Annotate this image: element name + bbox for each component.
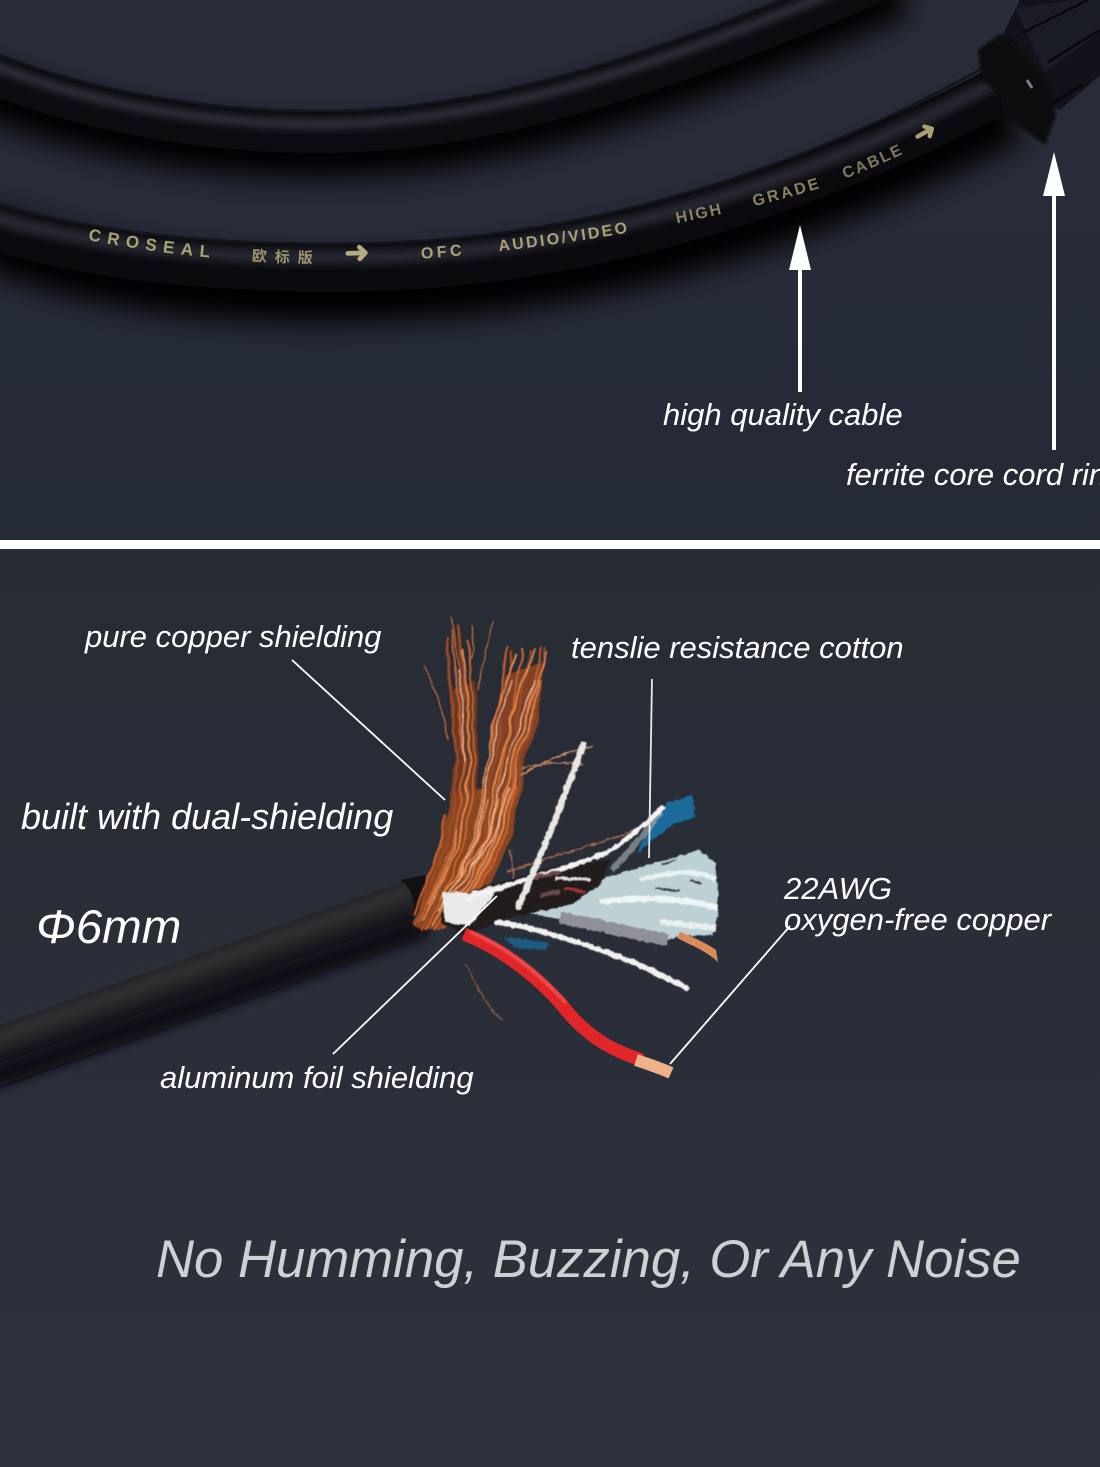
label: high quality cable: high quality cable <box>663 397 903 432</box>
cable print text: CABLE <box>842 144 902 178</box>
arrow: high quality cable <box>789 225 811 392</box>
copper shielding strands <box>413 618 548 930</box>
black cable sheath <box>0 875 430 1078</box>
cable print text: AUDIO/VIDEO <box>499 222 626 252</box>
cable print text: 欧标版 <box>252 248 312 264</box>
cable print text: CROSEAL <box>90 229 210 258</box>
red insulated conductor <box>464 932 671 1073</box>
tensile cotton fibres <box>530 850 718 943</box>
panel: cable cross-section photo <box>0 549 1100 1467</box>
label: pure copper shielding: pure copper shielding <box>84 619 381 654</box>
upper cable <box>0 0 900 152</box>
lower cable with print <box>0 68 1030 332</box>
cable print text: ➜ <box>346 244 368 262</box>
cable print text: HIGH <box>676 203 721 224</box>
label: built with dual-shielding: built with dual-shielding <box>21 796 393 837</box>
tinned copper core end <box>677 932 718 962</box>
aluminium foil shielding <box>440 806 664 935</box>
stray copper wires <box>466 746 652 1020</box>
blue insulated core <box>503 795 695 950</box>
label: 22AWG oxygen-free copper: 22AWG <box>783 871 892 906</box>
leader lines <box>292 660 790 1064</box>
cable print text: OFC <box>422 244 462 258</box>
headline: no noise: No Humming, Buzzing, Or Any Noise <box>156 1230 1021 1289</box>
label: cable diameter: Φ6mm <box>36 901 181 954</box>
cable print text: ➜ <box>915 124 934 139</box>
cable print text: GRADE <box>753 178 820 206</box>
label: tensile resistance cotton: tenslie resistance cotton <box>571 630 904 665</box>
icon: ferrite core cord ring <box>978 0 1100 145</box>
panel: cable exterior photo <box>0 0 1100 492</box>
label: 22AWG oxygen-free copper: oxygen-free copper <box>784 902 1053 937</box>
divider band <box>0 540 1100 549</box>
label: aluminum foil shielding: aluminum foil shielding <box>160 1060 474 1095</box>
arrow: ferrite core cord ring <box>1043 152 1065 450</box>
white drain threads <box>497 745 687 988</box>
cable print text <box>90 124 934 264</box>
